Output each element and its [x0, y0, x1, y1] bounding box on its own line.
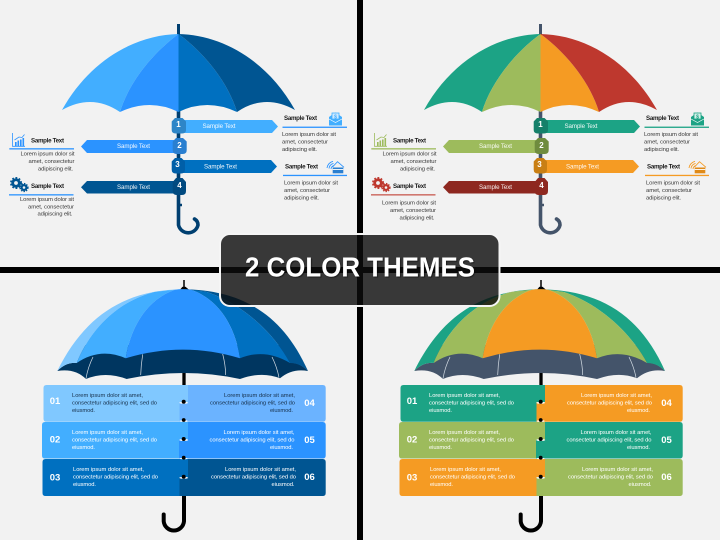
callout: lower left: Sample Text: [393, 183, 426, 190]
card 01: [44, 385, 188, 422]
card 02: [42, 422, 188, 458]
card 02: 02: [50, 434, 60, 446]
panel: blue umbrella with six cards: [0, 273, 357, 540]
callout: top right: amet, consectetur: [644, 140, 690, 146]
arrow 2: [81, 138, 187, 154]
card 04: Lorem ipsum dolor sit amet,: [224, 393, 295, 399]
card 06: [180, 459, 326, 496]
umbrella shaft and hook: [521, 280, 546, 530]
callout: top right: adipiscing elit.: [644, 147, 679, 153]
shaft connector pins: [179, 400, 188, 479]
card 05: 05: [304, 435, 315, 446]
callout: lower right: amet, consectetur: [284, 188, 330, 194]
callout: lower left: Lorem ipsum dolor sit: [20, 197, 74, 203]
card 02: consectetur adipiscing elit, sed do: [429, 438, 514, 444]
card 02: [399, 422, 545, 458]
callout: top right: Lorem ipsum dolor sit: [282, 132, 336, 138]
arrow 1: Sample Text: [564, 123, 598, 130]
callout: lower right: Sample Text: [285, 164, 318, 170]
panel: multicolor umbrella with six cards: [363, 273, 720, 540]
callout: lower left: Sample Text: [31, 183, 64, 190]
card 05: eiusmod.: [270, 445, 293, 451]
arrow 4: [443, 178, 548, 195]
card 06: Lorem ipsum dolor sit amet,: [582, 467, 653, 473]
icon: money envelope: $: [334, 114, 337, 120]
callout: top right: Sample Text: [646, 115, 679, 122]
arrow 4: Sample Text: [479, 184, 512, 191]
card 06: consectetur adipiscing elit, sed do: [211, 474, 296, 480]
canopy segments: [57, 289, 308, 371]
card 05: Lorem ipsum dolor sit amet,: [224, 430, 295, 436]
card 02: 02: [407, 434, 417, 446]
card 06: 06: [661, 472, 672, 483]
umbrella canopy: [62, 34, 295, 112]
banner: 2 color themes: [220, 234, 500, 306]
callout: lower right: adipiscing elit.: [284, 196, 319, 202]
card 04: eiusmod.: [627, 408, 650, 414]
arrow 2: [443, 138, 549, 154]
callout: top right: Lorem ipsum dolor sit: [644, 132, 698, 138]
card 04: [536, 385, 683, 422]
banner title: 2 COLOR THEMES: [245, 252, 475, 282]
shaft connector pins: [536, 400, 545, 479]
arrow 3: [172, 158, 277, 174]
umbrella shaft and hook: [540, 24, 560, 233]
icon: gears: [11, 178, 28, 191]
arrow 1: 1: [538, 120, 543, 129]
arrow 2: Sample Text: [117, 143, 150, 150]
card 03: 03: [50, 472, 60, 484]
card 03: Lorem ipsum dolor sit amet,: [430, 467, 501, 473]
card 03: eiusmod.: [430, 482, 453, 488]
card 02: Lorem ipsum dolor sit amet,: [72, 430, 143, 436]
card 04: 04: [304, 398, 315, 409]
panel: blue umbrella with four arrows: [0, 0, 357, 267]
callout: top right: [644, 112, 709, 153]
callout: lower left: adipiscing elit.: [38, 212, 73, 218]
icon: wifi and card: [689, 161, 706, 173]
card 01: Lorem ipsum dolor sit amet,: [429, 393, 500, 399]
callout: upper left: Sample Text: [31, 138, 64, 144]
umbrella shaft and hook: [164, 280, 189, 530]
callout: lower right: adipiscing elit.: [646, 196, 681, 202]
callout: upper left: Lorem ipsum dolor sit: [382, 152, 437, 158]
card 02: eiusmod.: [429, 445, 452, 451]
arrow 4: 4: [177, 181, 182, 190]
card 04: 04: [661, 398, 672, 409]
icon: gears: [373, 178, 390, 191]
umbrella shaft and hook: [178, 24, 198, 233]
arrow 2: Sample Text: [479, 143, 512, 150]
card 05: eiusmod.: [627, 445, 650, 451]
card 06: eiusmod.: [272, 482, 295, 488]
card 05: consectetur adipiscing elit, sed do: [566, 438, 652, 444]
callout: upper left: [9, 133, 75, 173]
card 06: consectetur adipiscing elit, sed do: [568, 474, 653, 480]
umbrella canopy: [57, 289, 308, 379]
card 06: 06: [304, 472, 315, 483]
card 04: consectetur adipiscing elit, sed do: [567, 400, 652, 406]
callout: lower right: Sample Text: [647, 164, 680, 170]
card 02: consectetur adipiscing elit, sed do: [72, 438, 157, 444]
card 01: [400, 385, 545, 422]
arrow 4: 4: [539, 181, 544, 190]
callout: lower left: [371, 178, 436, 222]
callout: lower right: Lorem ipsum dolor sit: [646, 180, 700, 186]
arrow 3: Sample Text: [204, 164, 237, 170]
callout: upper left: Lorem ipsum dolor sit: [20, 152, 75, 158]
card 06: Lorem ipsum dolor sit amet,: [225, 467, 296, 473]
callout: lower right: [283, 161, 347, 202]
callout: lower right: amet, consectetur: [646, 188, 692, 194]
callout: top right: Sample Text: [284, 115, 317, 122]
callout: lower left: amet, consectetur: [390, 208, 436, 214]
card 01: Lorem ipsum dolor sit amet,: [72, 393, 143, 399]
card 04: eiusmod.: [270, 408, 293, 414]
arrow 1: [172, 118, 278, 134]
card 03: consectetur adipiscing elit, sed do: [73, 474, 158, 480]
arrow 1: Sample Text: [202, 123, 236, 130]
callout: top right: [282, 112, 347, 153]
card 06: [536, 459, 683, 496]
callout: lower left: Lorem ipsum dolor sit: [382, 200, 436, 206]
card 02: eiusmod.: [72, 445, 95, 451]
card 05: [536, 422, 683, 458]
arrow 1: 1: [176, 120, 181, 129]
card 03: [400, 459, 545, 496]
card 04: [180, 385, 326, 422]
card 01: consectetur adipiscing elit, sed do: [72, 400, 157, 406]
callout: lower right: [645, 161, 709, 202]
card 03: [42, 459, 188, 496]
icon: bar chart: [12, 133, 25, 146]
card 02: Lorem ipsum dolor sit amet,: [429, 430, 500, 436]
callout: upper left: amet, consectetur: [390, 159, 437, 165]
callout: lower right: Lorem ipsum dolor sit: [284, 180, 338, 186]
callout: upper left: adipiscing elit.: [38, 167, 73, 173]
icon: bar chart: [374, 133, 387, 146]
card 03: consectetur adipiscing elit, sed do: [430, 474, 515, 480]
card 01: 01: [407, 396, 418, 407]
callout: upper left: Sample Text: [393, 138, 426, 144]
icon: money envelope: $: [696, 114, 699, 120]
callout: upper left: adipiscing elit.: [400, 167, 435, 173]
arrow 1: [534, 118, 640, 134]
callout: lower left: [9, 178, 74, 218]
arrow 3: 3: [175, 160, 180, 169]
card 01: eiusmod.: [72, 408, 95, 414]
callout: top right: adipiscing elit.: [282, 147, 317, 153]
panel: multicolor umbrella with four arrows: [363, 0, 720, 267]
card 05: [179, 422, 326, 458]
icon: wifi and card: [327, 161, 344, 173]
card 01: eiusmod.: [429, 408, 452, 414]
callout: upper left: [371, 133, 437, 173]
arrow 3: 3: [537, 160, 542, 169]
arrow 2: 2: [539, 141, 544, 150]
arrow 3: [534, 158, 639, 174]
card 04: consectetur adipiscing elit, sed do: [210, 400, 295, 406]
arrow 2: 2: [177, 141, 182, 150]
umbrella canopy: [424, 34, 657, 112]
card 05: Lorem ipsum dolor sit amet,: [580, 430, 652, 436]
arrow 4: Sample Text: [117, 184, 150, 191]
card 03: Lorem ipsum dolor sit amet,: [73, 467, 144, 473]
card 03: 03: [407, 472, 417, 484]
callout: upper left: amet, consectetur: [28, 159, 75, 165]
underside: [414, 345, 665, 379]
umbrella canopy: [414, 289, 665, 379]
callout: top right: amet, consectetur: [282, 140, 328, 146]
underside: [57, 345, 308, 379]
card 01: 01: [50, 396, 61, 407]
card 05: consectetur adipiscing elit, sed do: [210, 438, 294, 444]
callout: lower left: amet, consectetur: [28, 204, 74, 210]
callout: lower left: adipiscing elit.: [400, 216, 435, 222]
card 03: eiusmod.: [73, 482, 96, 488]
arrow 4: [81, 178, 186, 195]
arrow 3: Sample Text: [566, 164, 599, 170]
card 01: consectetur adipiscing elit, sed do: [429, 400, 514, 406]
card 06: eiusmod.: [628, 482, 652, 488]
card 05: 05: [661, 435, 672, 446]
canopy segments: [414, 289, 665, 371]
card 04: Lorem ipsum dolor sit amet,: [581, 393, 652, 399]
